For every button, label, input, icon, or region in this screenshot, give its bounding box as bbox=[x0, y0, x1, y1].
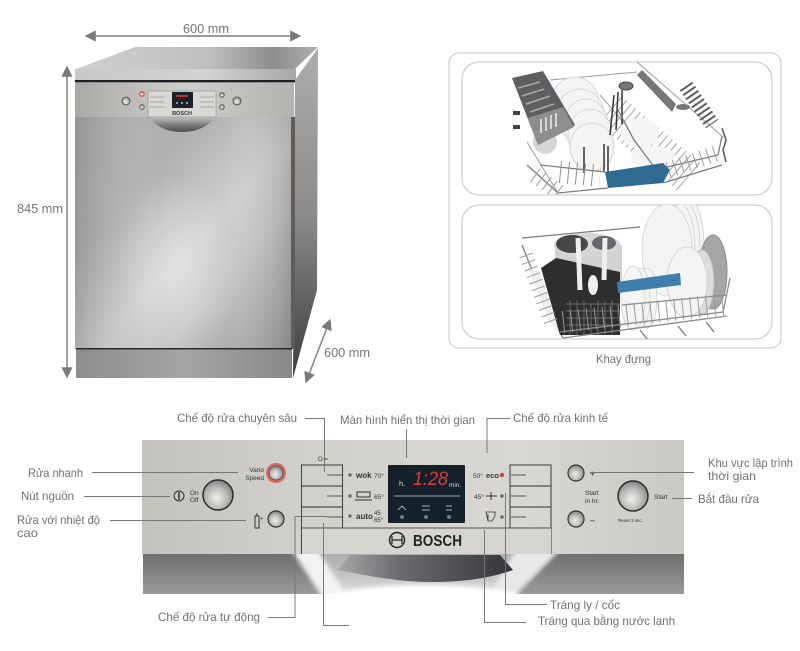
control panel photo bbox=[142, 440, 684, 611]
label: Chế độ rửa chuyên sâu: Chế độ rửa chuyên sâu bbox=[177, 411, 297, 425]
start in hours label bbox=[585, 490, 599, 505]
bosch logo strip bbox=[302, 528, 551, 554]
left programme labels: auto bbox=[356, 512, 373, 521]
label: Tráng ly / cốc bbox=[506, 493, 620, 612]
start in hours label: Start bbox=[585, 490, 599, 497]
label: Tráng qua bằng nước lạnh bbox=[484, 530, 675, 628]
dishwasher control panel bbox=[75, 83, 294, 117]
vario speed button bbox=[245, 463, 286, 483]
racks frame bbox=[449, 53, 781, 348]
label: Rửa với nhiệt độ cao: cao bbox=[17, 526, 38, 540]
bosch logo strip: BOSCH bbox=[413, 533, 462, 550]
dishwasher centre fascia bbox=[148, 91, 216, 117]
caption: Khay đựng: Khay đựng bbox=[596, 352, 651, 366]
vario speed button: Speed bbox=[245, 475, 264, 482]
label: Chế độ rửa kinh tế: Chế độ rửa kinh tế bbox=[513, 411, 608, 425]
right programme labels bbox=[473, 471, 504, 521]
depth dimension bbox=[306, 320, 370, 382]
unlabelled leader line bbox=[324, 523, 349, 626]
minus button bbox=[568, 511, 595, 527]
label: Tráng qua bằng nước lạnh: Tráng qua bằng nước lạnh bbox=[538, 613, 675, 628]
left button block bbox=[302, 465, 342, 554]
label: Bắt đầu rửa bbox=[672, 491, 759, 506]
dishwasher centre fascia: BOSCH bbox=[172, 111, 192, 117]
start button: Reset 3 sec. bbox=[618, 518, 643, 523]
minus button: – bbox=[590, 515, 595, 525]
left programme labels: 65° bbox=[374, 493, 384, 501]
depth dimension: 600 mm bbox=[324, 346, 370, 360]
label: Khu vực lập trình thời gian: Khu vực lập trình bbox=[708, 456, 793, 470]
dishwasher plinth bbox=[76, 349, 292, 378]
left programme labels: wok bbox=[355, 471, 372, 480]
plus button bbox=[568, 465, 595, 481]
upper rack blue handle bbox=[605, 163, 670, 188]
lower rack front wires bbox=[526, 255, 730, 340]
label: Khu vực lập trình thời gian: thời gian bbox=[708, 469, 756, 483]
time display bbox=[388, 465, 465, 523]
time display: 1:28 bbox=[413, 469, 448, 490]
lower rack pot bbox=[554, 233, 622, 285]
label: Tráng ly / cốc: Tráng ly / cốc bbox=[550, 598, 620, 612]
lower rack blue handle bbox=[617, 273, 681, 293]
label: Chế độ rửa kinh tế bbox=[487, 411, 608, 453]
label: Rửa nhanh: Rửa nhanh bbox=[28, 466, 83, 480]
time display: min. bbox=[449, 482, 461, 489]
label: Rửa với nhiệt độ cao bbox=[17, 513, 246, 540]
dishwasher top surface bbox=[76, 47, 318, 69]
start in hours label: in hr. bbox=[585, 498, 599, 505]
lower rack plates bbox=[621, 204, 727, 330]
label: Khu vực lập trình thời gian bbox=[590, 456, 793, 483]
panel: upper rack bbox=[462, 62, 772, 195]
vario speed button: Vario bbox=[249, 467, 264, 474]
dishwasher illustration bbox=[75, 47, 318, 378]
label: Rửa với nhiệt độ cao: Rửa với nhiệt độ bbox=[17, 513, 100, 527]
high temperature button: + bbox=[260, 517, 264, 523]
dishwasher door bbox=[75, 117, 291, 365]
child lock icon: O⊸ bbox=[318, 457, 328, 463]
lower door strip with handle bbox=[143, 554, 684, 594]
left programme labels: 65° bbox=[374, 518, 384, 524]
lower rack back wires bbox=[522, 227, 640, 338]
on off button: Off bbox=[190, 497, 199, 504]
left programme labels bbox=[348, 471, 384, 524]
button tick marks bbox=[327, 475, 526, 517]
right programme labels: 45° bbox=[474, 493, 484, 501]
dishwasher panel knobs bbox=[122, 92, 241, 109]
plus button: + bbox=[590, 469, 595, 479]
left programme labels: 70° bbox=[374, 472, 384, 480]
label: Chế độ rửa tự động: Chế độ rửa tự động bbox=[158, 610, 260, 624]
right button block bbox=[510, 465, 551, 554]
label: Màn hình hiển thị thời gian bbox=[340, 413, 475, 458]
upper rack plates bbox=[533, 77, 675, 173]
dishwasher front strip bbox=[75, 69, 296, 81]
upper rack cup shelf bbox=[619, 70, 726, 162]
left programme labels: 45 bbox=[374, 511, 381, 517]
label: Chế độ rửa chuyên sâu bbox=[177, 411, 324, 472]
width dimension: 600 mm bbox=[183, 22, 229, 36]
right programme labels: 50° bbox=[473, 472, 483, 480]
lower rack cutlery basket bbox=[527, 238, 620, 335]
high temperature button bbox=[255, 511, 284, 528]
panel: lower rack bbox=[462, 204, 772, 340]
on off button: On bbox=[190, 490, 199, 497]
dishwasher side bbox=[293, 48, 318, 378]
start button: Start bbox=[654, 494, 668, 501]
dishwasher door handle bbox=[149, 117, 215, 132]
label: Chế độ rửa tự động bbox=[158, 516, 327, 624]
height dimension: 845 mm bbox=[17, 202, 63, 216]
label: Nút nguồn: Nút nguồn bbox=[21, 489, 74, 503]
upper rack front wires bbox=[527, 110, 722, 193]
start button bbox=[618, 481, 668, 523]
label: Bắt đầu rửa: Bắt đầu rửa bbox=[698, 491, 759, 506]
right programme labels: eco bbox=[486, 471, 499, 480]
time display: h. bbox=[399, 479, 405, 488]
label: Màn hình hiển thị thời gian: Màn hình hiển thị thời gian bbox=[340, 413, 475, 427]
upper rack cutlery tray bbox=[512, 71, 575, 145]
upper rack back wires bbox=[527, 62, 723, 193]
on off button bbox=[174, 480, 233, 510]
